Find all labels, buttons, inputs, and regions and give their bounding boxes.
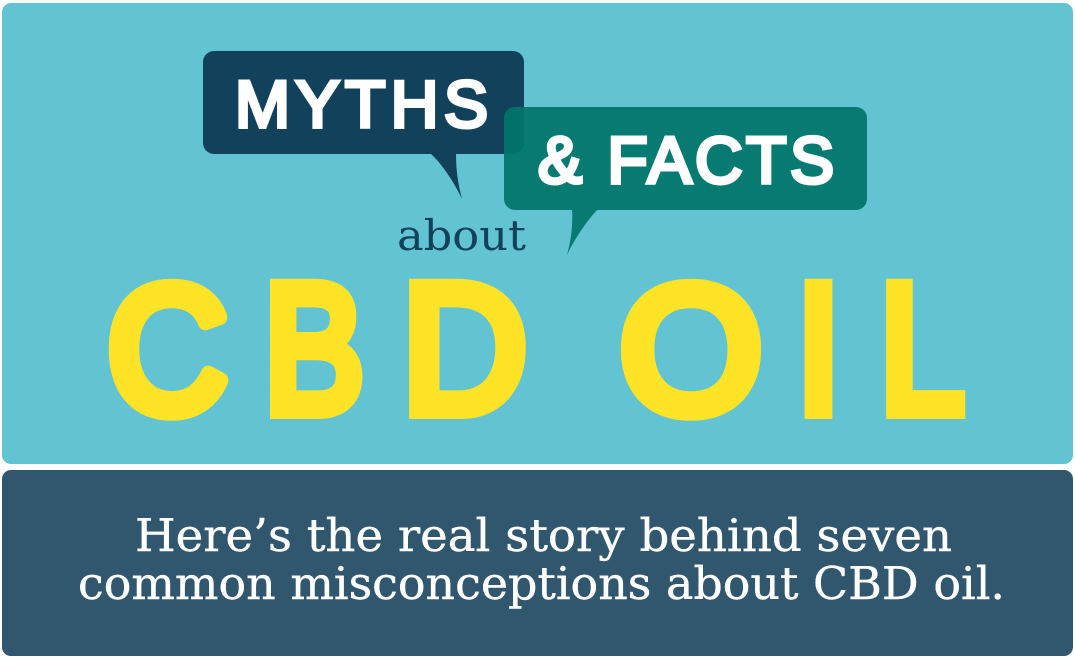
heading: myths: MYTHS <box>235 67 488 141</box>
heading: CBD OIL: O <box>620 251 762 450</box>
heading: CBD OIL: D <box>402 246 527 450</box>
heading: CBD OIL <box>108 246 964 451</box>
text: subtitle: Here’s the real story behind seven <box>135 509 952 562</box>
speech bubble: facts <box>504 107 867 255</box>
panel: bottom subtitle background <box>2 470 1073 656</box>
heading: CBD OIL: B <box>264 248 364 451</box>
text: subtitle <box>78 509 1005 610</box>
text: subtitle: common misconceptions about CBD oil. <box>78 557 1005 610</box>
text: about: about <box>397 211 526 260</box>
heading: CBD OIL: L <box>880 248 964 451</box>
heading: and facts: & FACTS <box>538 123 834 197</box>
heading: CBD OIL: I <box>796 248 841 451</box>
speech bubble: myths <box>203 51 524 199</box>
heading: CBD OIL: C <box>108 250 227 449</box>
panel: top title background <box>2 3 1073 464</box>
